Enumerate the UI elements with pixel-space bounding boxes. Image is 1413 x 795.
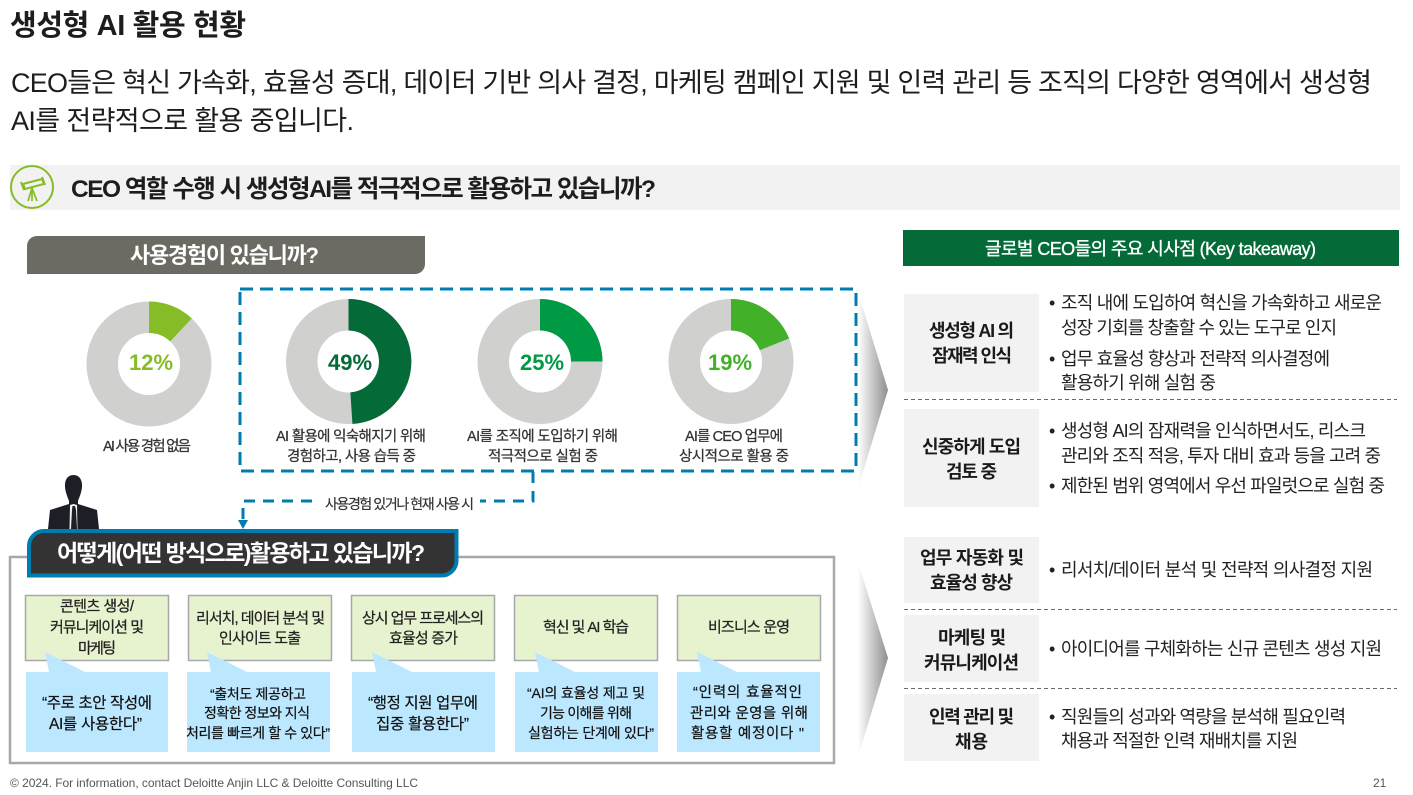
takeaway: automation: 리서치/데이터 분석 및 전략적 의사결정 지원: [1061, 560, 1373, 580]
quote: innovation: 기능 이해를 위해: [540, 705, 632, 721]
takeaway: cautious adoption: [904, 409, 1385, 507]
quote: business operations: “인력의 효율적인: [693, 684, 802, 701]
category: process: 상시 업무 프로세스의: [362, 610, 484, 627]
category: business operations: 비즈니스 운영: [708, 619, 790, 636]
takeaway: automation: 효율성 향상: [930, 573, 1013, 593]
quote: innovation: 실험하는 단계에 있다”: [528, 725, 654, 741]
quote: content creation: AI를 사용한다”: [49, 715, 142, 733]
connector label: 사용경험 있거나 현재 사용 시: [325, 496, 474, 512]
footer copyright: © 2024. For information, contact Deloitte Anjin LLC & Deloitte Consulting LLC: [10, 776, 418, 790]
category: innovation: [514, 596, 658, 660]
quote: research: 정확한 정보와 지식: [204, 705, 310, 721]
takeaway: HR: 채용: [955, 732, 988, 752]
quote: business operations: [677, 652, 820, 752]
donut: 25%: 25%: [520, 350, 564, 375]
quote: process: 집중 활용한다”: [376, 715, 469, 733]
donut: 49%: 경험하고, 사용 습득 중: [287, 448, 416, 465]
takeaway: HR: [904, 694, 1346, 761]
dashed box: experienced group: [240, 289, 856, 471]
takeaway: marketing: •: [1049, 639, 1055, 659]
donut: 19%: 19%: [708, 350, 752, 375]
category: process: 효율성 증가: [389, 630, 458, 647]
question banner: [10, 165, 1400, 210]
quote: process: [352, 652, 495, 752]
takeaway: cautious adoption: 관리와 조직 적응, 투자 대비 효과 등을 고려 중: [1061, 446, 1381, 466]
takeaway: marketing: 아이디어를 구체화하는 신규 콘텐츠 생성 지원: [1061, 639, 1382, 659]
page number: 21: [1373, 776, 1387, 790]
takeaway: potential recognition: 활용하기 위해 실험 중: [1061, 373, 1216, 393]
category: content creation: 콘텐츠 생성/: [60, 598, 135, 615]
takeaway: marketing: 커뮤니케이션: [924, 653, 1019, 673]
takeaway: potential recognition: 생성형 AI 의: [929, 321, 1014, 341]
category: business operations: [678, 596, 820, 660]
category: research: 인사이트 도출: [219, 630, 301, 647]
donut: 49%: AI 활용에 익숙해지기 위해: [276, 428, 426, 445]
quote: content creation: [26, 652, 168, 752]
quote: research: 처리를 빠르게 할 수 있다”: [186, 725, 330, 741]
takeaway: HR: 직원들의 성과와 역량을 분석해 필요인력: [1061, 707, 1346, 727]
title: 생성형 AI 활용 현황: [10, 9, 246, 42]
category: content creation: [26, 596, 168, 660]
donut: 19%: 상시적으로 활용 중: [679, 448, 789, 465]
category: process: [352, 596, 494, 660]
quote: innovation: “AI의 효율성 제고 및: [527, 685, 645, 701]
donut: 25%: AI를 조직에 도입하기 위해: [467, 428, 618, 445]
donut: no experience 12%: [102, 301, 196, 455]
icon: telescope: [11, 166, 53, 208]
takeaway: potential recognition: 잠재력 인식: [932, 346, 1012, 366]
arrow: chevron lower: [858, 562, 888, 757]
takeaway: cautious adoption: 검토 중: [946, 462, 997, 482]
donut: 25%: 적극적으로 실험 중: [488, 448, 598, 465]
heading: usage experience: 사용경험이 있습니까?: [130, 243, 319, 268]
donut: 49%: 49%: [328, 350, 372, 375]
category: content creation: 커뮤니케이션 및: [50, 619, 144, 636]
subtitle text: AI를 전략적으로 활용 중입니다.: [11, 106, 354, 136]
takeaway: potential recognition: [904, 293, 1382, 393]
heading: key takeaway: 글로벌 CEO들의 주요 시사점 (Key takeaway): [985, 239, 1316, 259]
takeaway: cautious adoption: 제한된 범위 영역에서 우선 파일럿으로 실험 중: [1061, 476, 1385, 496]
donut: no experience 12%: 12%: [129, 350, 173, 375]
arrow: dashed connector: [238, 472, 533, 529]
takeaway: cautious adoption: 신중하게 도입: [922, 437, 1021, 457]
quote: business operations: 활용할 예정이다 ": [691, 725, 804, 742]
takeaway: marketing: [904, 615, 1382, 682]
heading: usage experience: [27, 236, 425, 274]
panel: how it is used: [10, 557, 834, 763]
takeaway: HR: •: [1049, 707, 1055, 727]
takeaway: automation: •: [1049, 560, 1055, 580]
category: research: [188, 596, 332, 660]
donut: 19%: AI를 CEO 업무에: [685, 428, 783, 445]
heading: key takeaway: [903, 230, 1399, 266]
takeaway: automation: 업무 자동화 및: [920, 548, 1024, 568]
takeaway: HR: 채용과 적절한 인력 재배치를 지원: [1061, 731, 1298, 751]
heading: how do you use: 어떻게(어떤 방식으로)활용하고 있습니까?: [57, 540, 425, 566]
subtitle text: CEO들은 혁신 가속화, 효율성 증대, 데이터 기반 의사 결정, 마케팅 캠페인 지원 및 인력 관리 등 조직의 다양한 영역에서 생성형: [11, 68, 1372, 98]
quote: research: “출처도 제공하고: [210, 686, 306, 702]
subtitle text: [11, 68, 1372, 136]
category: research: 리서치, 데이터 분석 및: [196, 610, 325, 627]
takeaway: marketing: 마케팅 및: [938, 628, 1006, 648]
donut: 25%: [467, 299, 618, 465]
icon: businessman silhouette: [48, 475, 99, 529]
quote: business operations: 관리와 운영을 위해: [690, 705, 808, 722]
quote: content creation: “주로 초안 작성에: [42, 694, 152, 712]
takeaway: potential recognition: •: [1049, 293, 1055, 313]
takeaway: cautious adoption: •: [1049, 476, 1055, 496]
donut: no experience 12%: AI 사용 경험 없음: [103, 438, 191, 455]
takeaway: HR: 인력 관리 및: [929, 707, 1014, 727]
category: content creation: 마케팅: [78, 640, 116, 657]
donut: 19%: [679, 299, 789, 465]
banner question text: CEO 역할 수행 시 생성형AI를 적극적으로 활용하고 있습니까?: [71, 175, 656, 203]
takeaway: potential recognition: •: [1049, 349, 1055, 369]
heading: how do you use: [29, 531, 457, 576]
takeaway: cautious adoption: •: [1049, 421, 1055, 441]
arrow: chevron upper: [858, 292, 888, 488]
takeaway: potential recognition: 조직 내에 도입하여 혁신을 가속화하고 새로운: [1061, 293, 1382, 313]
quote: research: [186, 652, 330, 752]
takeaway: cautious adoption: 생성형 AI의 잠재력을 인식하면서도, 리스크: [1061, 421, 1366, 441]
quote: innovation: [515, 652, 658, 752]
takeaway: automation: [904, 537, 1373, 603]
takeaway: potential recognition: 성장 기회를 창출할 수 있는 도구로 인지: [1061, 318, 1337, 338]
donut: 49%: [276, 299, 426, 465]
takeaway: potential recognition: 업무 효율성 향상과 전략적 의사결정에: [1061, 349, 1330, 369]
category: innovation: 혁신 및 AI 학습: [543, 619, 629, 636]
quote: process: “행정 지원 업무에: [368, 694, 478, 712]
